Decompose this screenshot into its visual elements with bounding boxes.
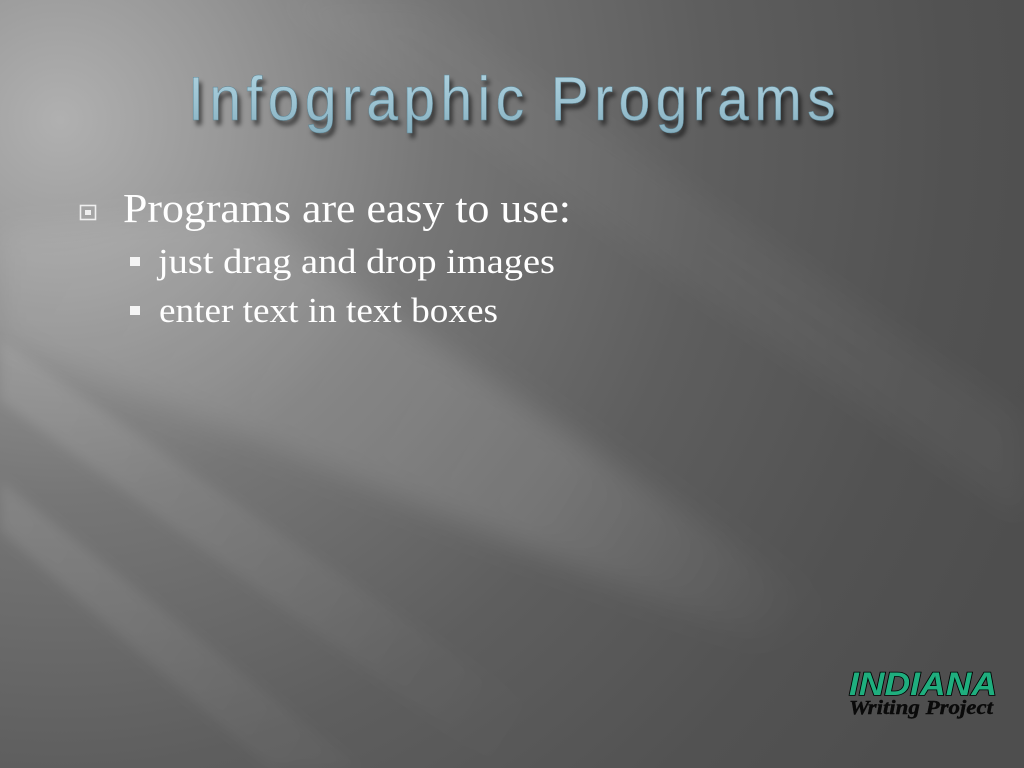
title: Infographic Programs [191, 69, 839, 139]
second level bullet: just drag and drop images: just drag and drop images [156, 242, 555, 281]
icon: hollow square bullet [80, 206, 96, 220]
logo tagline: Writing Project: Writing Project [849, 697, 995, 719]
bullet list [80, 185, 571, 330]
logo word: Indiana: INDIANA [849, 666, 997, 702]
icon: square bullet [130, 306, 140, 315]
second level bullet: enter text in text boxes: enter text in text boxes [159, 291, 498, 330]
icon: square bullet [130, 257, 140, 266]
logo: Indiana Writing Project [849, 666, 997, 719]
title: Infographic Programs [188, 64, 836, 134]
first level bullet: Programs are easy to use: Programs are easy to use: [123, 185, 571, 231]
